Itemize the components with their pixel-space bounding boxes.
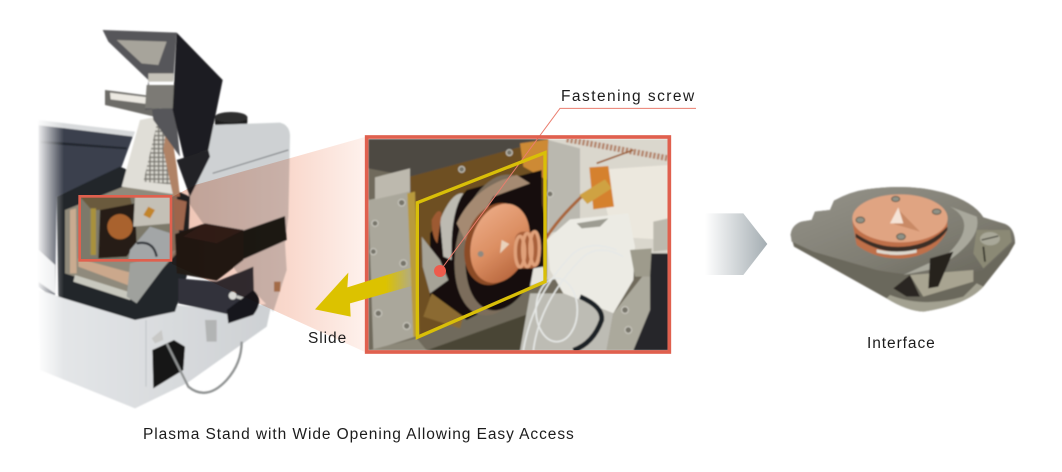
dark hose bbox=[573, 297, 602, 350]
coil bbox=[515, 232, 540, 268]
slotted screw bbox=[980, 232, 1000, 245]
screws bbox=[370, 150, 632, 333]
label: fastening screw: Fastening screw bbox=[561, 88, 696, 105]
upper lid interior bbox=[103, 30, 180, 157]
lower gas box bbox=[178, 267, 254, 314]
base bbox=[38, 290, 272, 408]
copper disc bbox=[464, 202, 506, 286]
rear housing bbox=[187, 123, 290, 312]
dark upper-left bbox=[368, 139, 548, 177]
disc screws bbox=[856, 196, 941, 240]
caption: Plasma Stand with Wide Opening Allowing Easy Access bbox=[143, 426, 575, 443]
copper block bbox=[589, 166, 614, 209]
chimney bbox=[215, 112, 247, 135]
label: interface: Interface bbox=[867, 335, 936, 352]
copper top bbox=[852, 194, 948, 242]
projection beam bbox=[172, 137, 365, 352]
photo frame bbox=[367, 137, 669, 352]
small highlighted region bbox=[78, 195, 172, 262]
chrome reflections bbox=[893, 275, 920, 297]
power connector bbox=[152, 340, 185, 388]
white apparatus bbox=[547, 213, 635, 313]
black cube bbox=[175, 223, 243, 281]
brass fitting bbox=[579, 179, 612, 204]
label: slide: Slide bbox=[308, 330, 347, 347]
fastening screw marker bbox=[434, 265, 446, 277]
zoomed photo panel bbox=[315, 108, 696, 352]
inner lid plate bbox=[122, 114, 179, 195]
black band bbox=[240, 216, 287, 260]
tubes bbox=[522, 276, 579, 350]
brown plate bbox=[410, 140, 547, 338]
interface part bbox=[791, 187, 1015, 312]
left metal plate bbox=[368, 192, 415, 350]
copper side bbox=[852, 222, 947, 258]
bottom dark bbox=[427, 313, 533, 350]
yellow slide area outline bbox=[417, 153, 545, 337]
instrument illustration bbox=[38, 30, 290, 408]
interior bbox=[65, 187, 180, 297]
base plate bbox=[791, 187, 1015, 312]
lid exterior bbox=[173, 33, 223, 158]
beaded strip bbox=[567, 139, 668, 158]
upper surface bbox=[791, 187, 1014, 275]
left edge fade bbox=[36, 110, 64, 400]
lower centre backdrop bbox=[520, 293, 613, 350]
dark right side bbox=[633, 253, 668, 350]
arrow to interface bbox=[705, 213, 767, 275]
leader line: fastening screw bbox=[440, 108, 696, 271]
right light wall bbox=[547, 139, 668, 280]
silver disc bbox=[453, 174, 514, 315]
opening frame bbox=[57, 167, 190, 320]
black recess bbox=[430, 170, 543, 320]
copper tube bbox=[545, 195, 583, 240]
slide arrow bbox=[315, 267, 412, 317]
left upper navy panel bbox=[38, 123, 133, 300]
